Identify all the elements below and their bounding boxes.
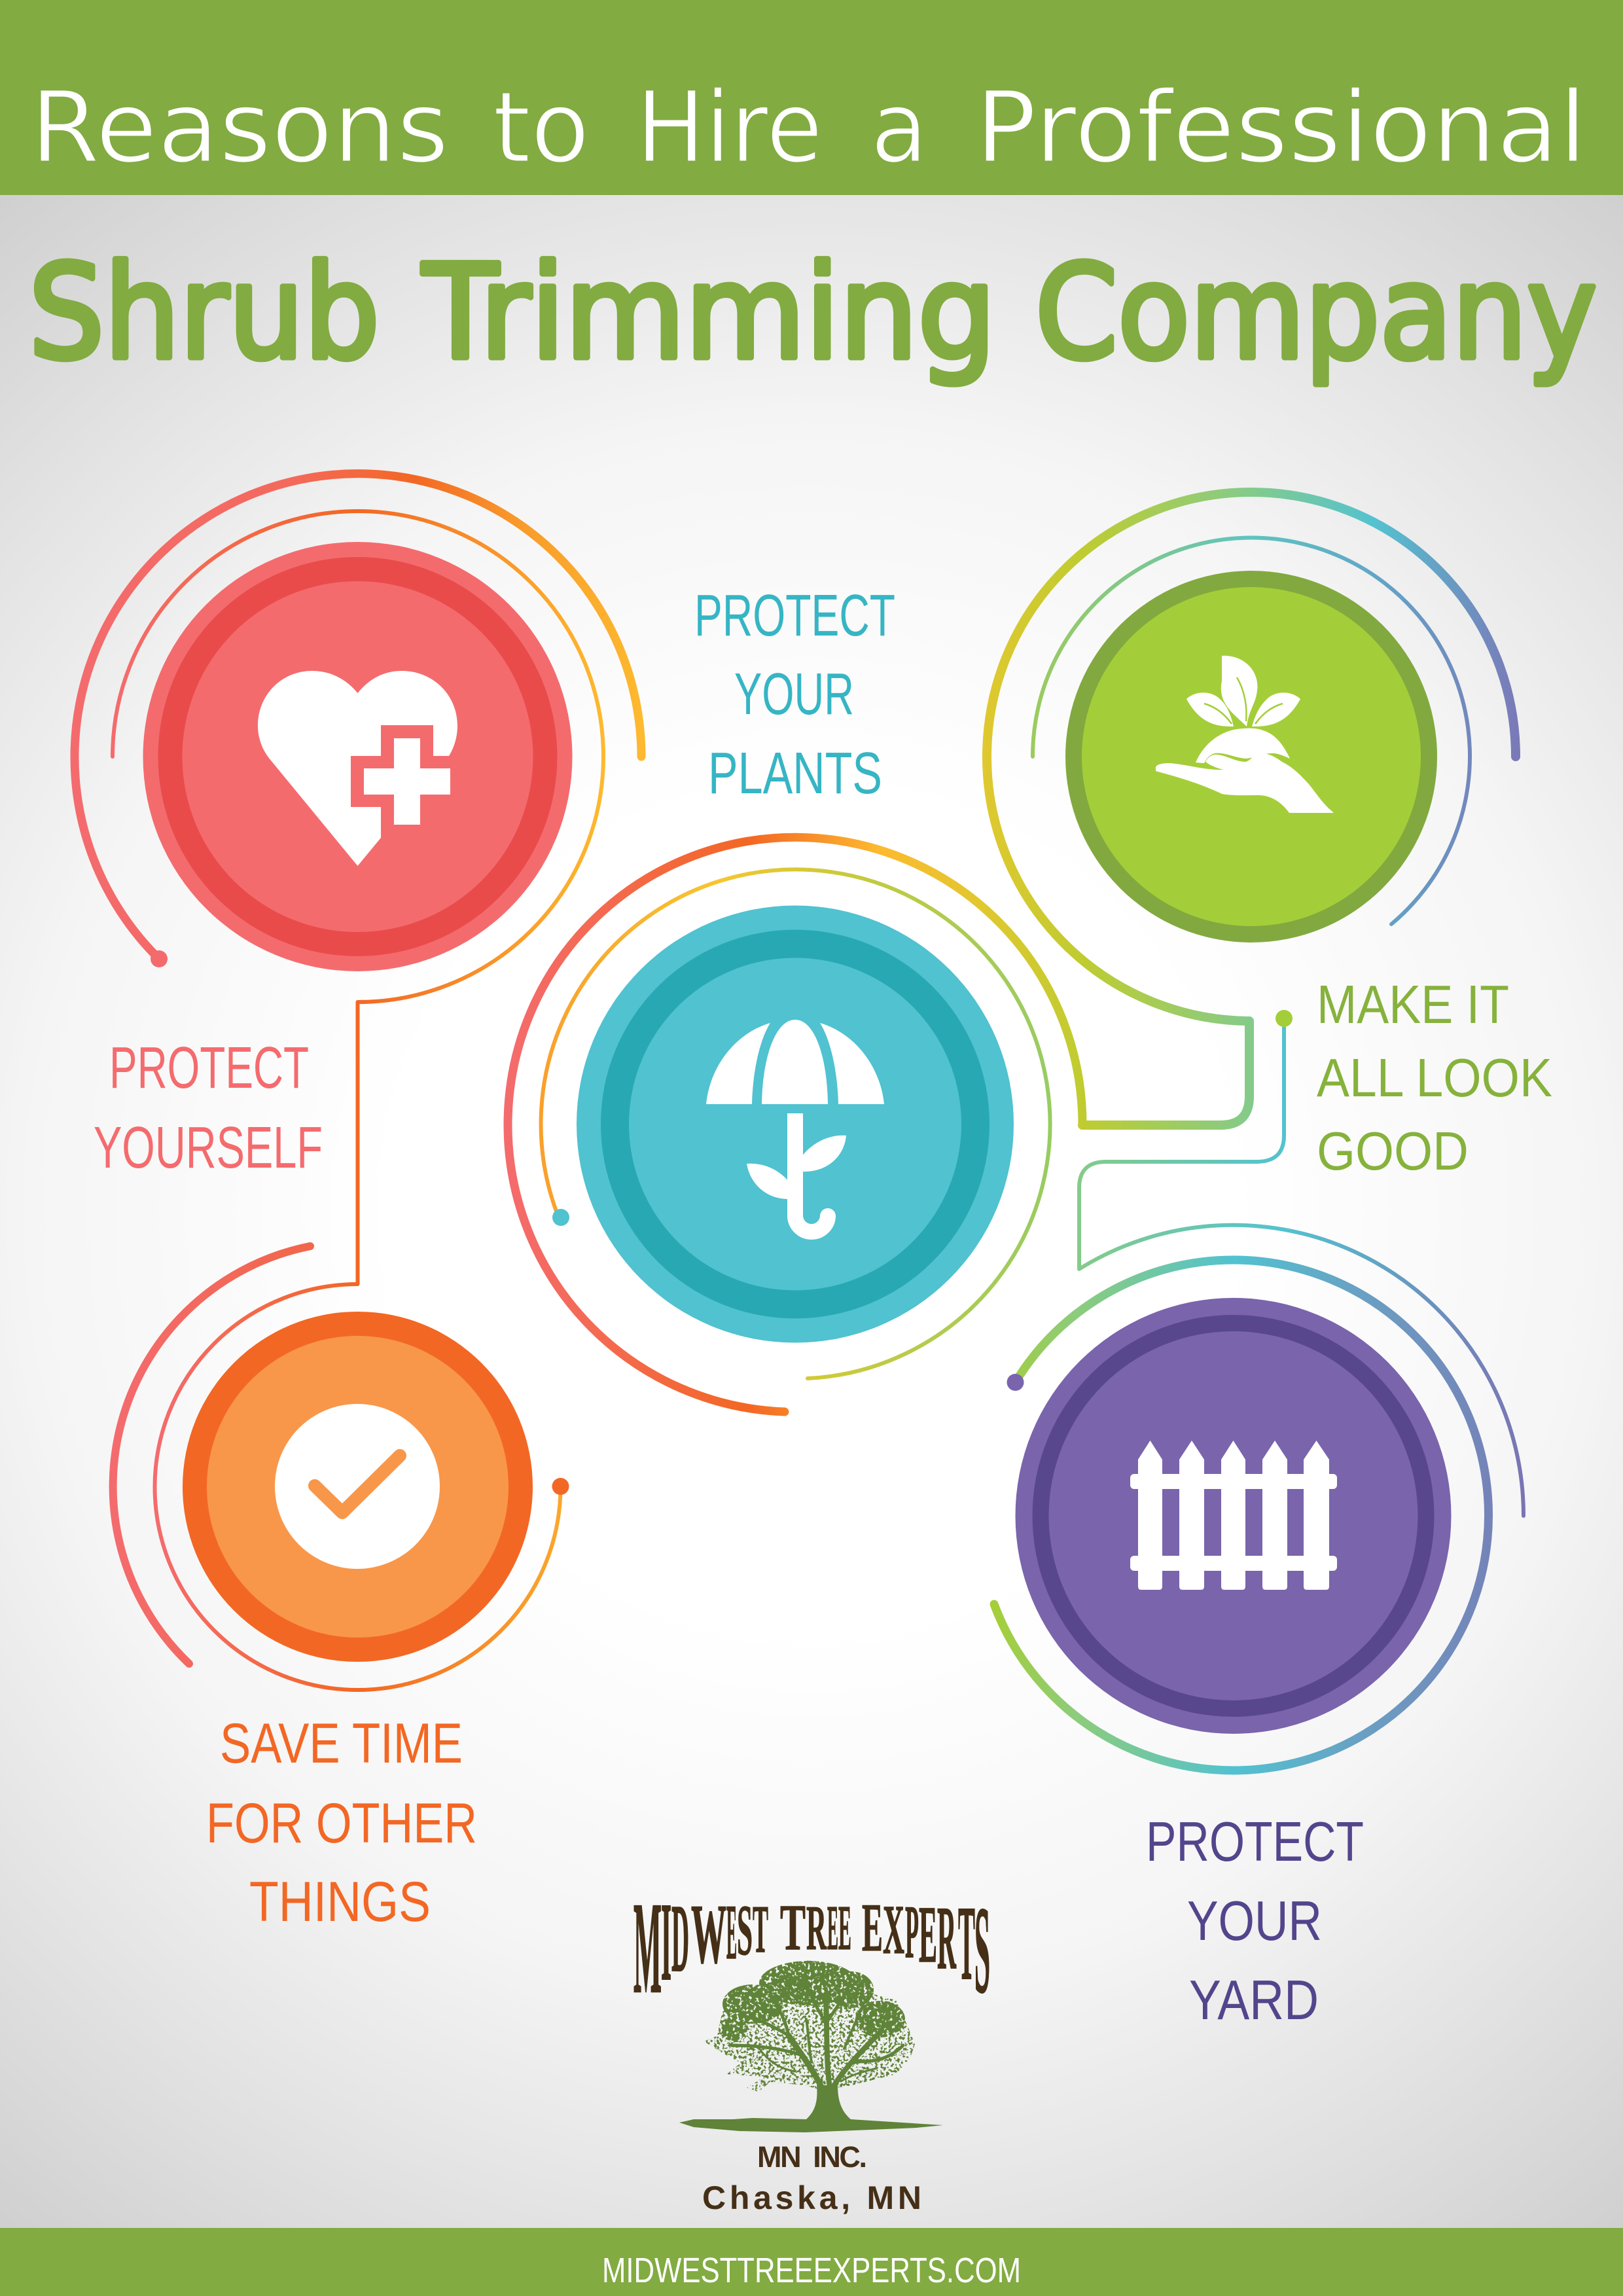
label: protect your yard: YARD: [1189, 1969, 1319, 2032]
red arc end dot: [151, 950, 168, 967]
icon: picket fence: [1130, 1441, 1337, 1590]
header banner: [0, 0, 1623, 195]
logo wordmark: E: [827, 1893, 838, 1964]
orange thin arc: [155, 1284, 561, 1690]
logo wordmark: T: [780, 1891, 806, 1964]
label: protect your plants: PROTECT: [694, 583, 895, 649]
label: save time for other things: [206, 1712, 477, 1933]
logo wordmark: E: [919, 1890, 937, 1980]
cyan panel outer arc: [508, 837, 1082, 1412]
logo wordmark: P: [905, 1891, 919, 1974]
green badge: [1065, 571, 1437, 942]
label: save time for other things: THINGS: [249, 1871, 431, 1933]
purple badge: [1016, 1298, 1452, 1734]
label: protect yourself: [94, 1035, 323, 1181]
label: protect your yard: YOUR: [1187, 1890, 1322, 1952]
title line one: Reasons: [30, 70, 449, 185]
label: make it all look good: MAKE IT: [1317, 974, 1509, 1035]
label: make it all look good: ALL LOOK: [1317, 1047, 1552, 1108]
panel: protect yourself: [75, 474, 641, 1284]
main heading: [29, 237, 1597, 388]
logo wordmark: I: [661, 1880, 671, 2004]
orange thick arc: [113, 1246, 310, 1664]
icon: check mark: [275, 1404, 440, 1569]
green inner arc: [1033, 538, 1470, 924]
green outer arc and connector: [987, 492, 1516, 1125]
main heading: Trimming: [422, 237, 996, 388]
panel: protect your yard: [994, 1010, 1524, 2032]
red outer arc: [75, 474, 641, 959]
label: protect yourself: PROTECT: [109, 1035, 309, 1101]
panel: save time for other things: [113, 1246, 569, 1933]
label: make it all look good: [1317, 974, 1552, 1181]
logo wordmark: S: [737, 1890, 753, 1970]
cyan panel inner arc: [541, 869, 1050, 1378]
panel: protect your plants: [508, 583, 1082, 1412]
red badge: [143, 542, 572, 971]
title line one: Professional: [975, 70, 1587, 185]
logo wordmark: E: [862, 1890, 883, 1966]
logo wordmark: R: [937, 1889, 957, 1988]
logo text: mn inc: MN INC.: [757, 2140, 867, 2174]
label: protect your plants: PLANTS: [708, 741, 882, 806]
label: save time for other things: FOR OTHER: [206, 1792, 477, 1855]
icon: hand holding plant: [1156, 656, 1334, 813]
panel: make it all look good: [987, 492, 1552, 1181]
logo wordmark: E: [838, 1893, 851, 1964]
title line one: Hire: [636, 70, 823, 185]
connector top dot: [1275, 1010, 1293, 1027]
title line one: [30, 70, 1587, 185]
logo tree: [679, 1960, 943, 2132]
red inner arc and connector: [113, 511, 603, 1284]
text: S: [974, 1881, 990, 2018]
footer url: MIDWESTTREEEXPERTS.COM: [602, 2251, 1021, 2290]
cyan badge: [577, 906, 1014, 1343]
logo wordmark: T: [753, 1892, 768, 1967]
logo wordmark: [633, 1876, 990, 2020]
label: save time for other things: SAVE TIME: [220, 1712, 463, 1775]
logo wordmark: T: [958, 1885, 975, 2002]
logo wordmark: X: [883, 1892, 904, 1969]
logo wordmark: W: [691, 1887, 726, 1981]
label: protect your plants: YOUR: [734, 662, 854, 727]
title line one: a: [870, 70, 928, 185]
logo wordmark: D: [671, 1885, 689, 1992]
label: make it all look good: GOOD: [1317, 1121, 1469, 1181]
label: protect your yard: PROTECT: [1146, 1811, 1364, 1873]
cyan arc end dot: [552, 1209, 569, 1226]
footer banner: [0, 2228, 1623, 2296]
label: protect your yard: [1146, 1811, 1364, 2032]
main heading: Shrub: [29, 237, 380, 388]
label: protect yourself: YOURSELF: [94, 1115, 323, 1181]
icon: heart with medical cross: [258, 671, 457, 866]
purple thick arc: [994, 1260, 1489, 1770]
title line one: to: [493, 70, 590, 185]
icon: umbrella with leaves: [706, 1020, 884, 1232]
orange badge: [183, 1312, 533, 1662]
logo text: chaska mn: Chaska, MN: [702, 2179, 921, 2216]
logo wordmark: M: [633, 1876, 662, 2020]
connector and purple outer thin arc: [1079, 1018, 1524, 1516]
logo wordmark: E: [726, 1889, 737, 1975]
orange arc end dot: [552, 1478, 569, 1495]
logo: midwest tree experts: [633, 1876, 990, 2216]
purple arc end dot: [1007, 1374, 1024, 1391]
label: protect your plants: [694, 583, 895, 806]
logo wordmark: R: [806, 1893, 827, 1964]
